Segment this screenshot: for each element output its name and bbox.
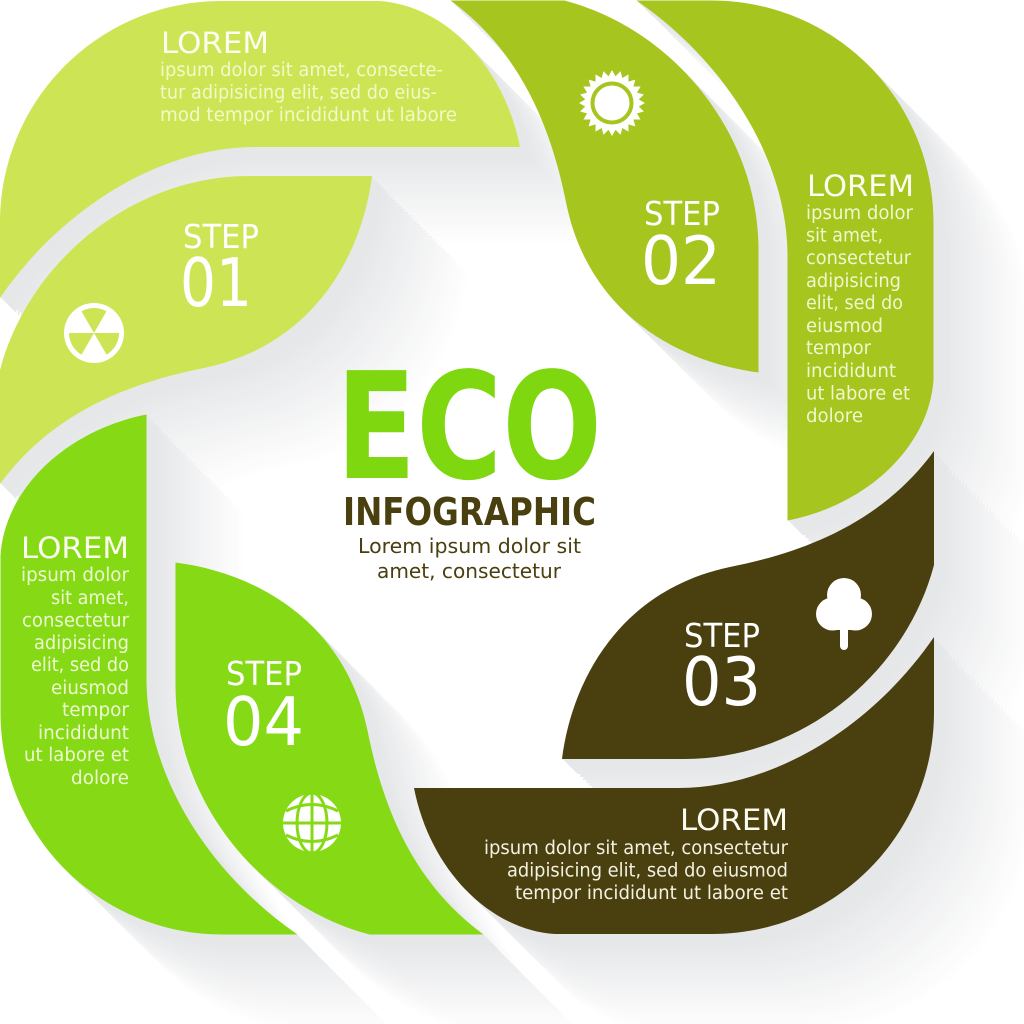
step 03 text block [484,838,788,904]
step 01 number: 01 [180,244,252,322]
step 04 text block: ut labore et [24,745,129,766]
step 04 text block [21,565,129,789]
step 04 heading: LOREM [21,531,129,565]
step 01 text block: ipsum dolor sit amet, consecte- [160,60,443,81]
step 02 text block: eiusmod [806,316,883,337]
step 04 text block: ipsum dolor [21,565,129,586]
step 04 text block: incididunt [38,723,129,744]
step 04 label: STEP [226,654,302,693]
step 01 label: STEP [183,217,259,256]
panel: step 04 [0,414,484,934]
step 01 heading: LOREM [161,26,269,60]
step 04 outer band [0,414,298,934]
panel: step 02 [450,0,934,520]
step 04 text block: dolore [71,768,129,789]
step 02 text block: consectetur [806,248,911,269]
step 01 text block [160,60,457,126]
step 02 text block: dolore [806,406,863,427]
panel: step 01 [0,1,520,484]
step 02 text block: adipisicing [806,271,901,292]
icon: radiation [64,303,124,363]
step 04 text block: adipisicing [34,633,129,654]
step 01 text block: mod tempor incididunt ut labore [160,105,457,126]
step 03 heading: LOREM [680,803,788,837]
step 03 text block: tempor incididunt ut labore et [515,883,788,904]
step 02 outer band [636,0,934,520]
step 01 outer band [0,1,520,298]
step 01 text block: tur adipisicing elit, sed do eius- [160,82,437,104]
step 04 number: 04 [223,683,304,761]
step 03 leaf [562,451,934,759]
step 02 text block: ut labore et [806,384,910,404]
step 02 text block [806,203,913,427]
step 04 text block: sit amet, [51,588,129,609]
step 03 text block: ipsum dolor sit amet, consectetur [484,838,788,859]
step 02 number: 02 [641,222,721,300]
step 02 text block: tempor [806,338,871,359]
icon: sun [579,70,645,136]
step 04 text block: tempor [62,700,129,721]
step 02 text block: sit amet, [806,226,883,246]
step 02 text block: ipsum dolor [806,203,913,224]
center description [358,534,581,583]
step 03 label: STEP [684,616,760,655]
step 02 text block: incididunt [806,361,896,382]
icon: globe [282,793,342,853]
title: ECO: ECO [336,341,602,513]
center description: amet, consectetur [377,559,562,583]
step 02 heading: LOREM [807,169,914,203]
step 04 leaf [176,562,484,934]
step 03 number: 03 [682,643,761,721]
step 01 leaf [0,176,372,484]
step 02 text block: elit, sed do [806,293,903,314]
step 04 text block: consectetur [22,610,129,632]
step 04 text block: elit, sed do [31,655,129,676]
step 02 leaf [450,0,758,372]
center description: Lorem ipsum dolor sit [358,534,581,558]
panel: step 03 [414,451,934,934]
icon: tree [816,578,872,650]
step 03 outer band [414,637,934,934]
step 02 label: STEP [644,194,720,233]
subtitle: INFOGRAPHIC: INFOGRAPHIC [343,490,596,535]
step 03 text block: adipisicing elit, sed do eiusmod [507,860,788,882]
step 04 text block: eiusmod [51,678,129,699]
